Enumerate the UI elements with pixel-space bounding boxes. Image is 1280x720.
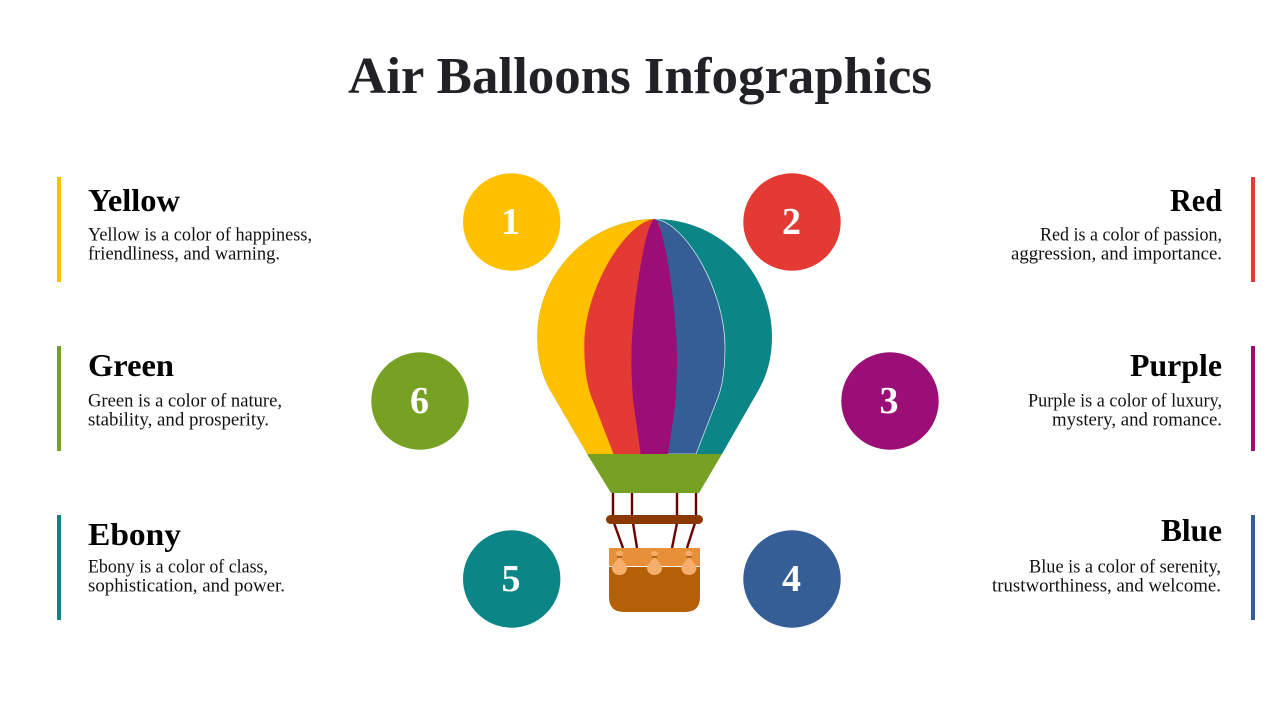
panel: green: stability, and prosperity.	[88, 410, 269, 430]
panel: purple: Purple	[1130, 347, 1222, 383]
panel: blue: Blue	[1161, 512, 1222, 548]
panel: yellow	[57, 177, 312, 282]
number badge 2	[743, 173, 841, 271]
panel: green: Green is a color of nature,	[88, 390, 282, 412]
panel: ebony: Ebony	[88, 516, 181, 552]
panel: ebony	[57, 515, 285, 620]
rope band	[606, 515, 703, 524]
balloon skirt	[587, 454, 722, 493]
number badge 6: 6	[410, 380, 429, 422]
sandbags	[612, 551, 696, 575]
panel: red: Red	[1170, 182, 1222, 218]
panel: blue: trustworthiness, and welcome.	[992, 576, 1221, 596]
hot air balloon illustration	[537, 219, 772, 612]
number badge 5	[463, 530, 560, 628]
panel: red: Red is a color of passion,	[1040, 224, 1222, 246]
panel: yellow: friendliness, and warning.	[88, 244, 280, 264]
panel: yellow: Yellow is a color of happiness,	[88, 224, 312, 246]
number badge 4: 4	[782, 558, 801, 600]
number badge 5: 5	[502, 558, 520, 600]
number badge 1	[463, 173, 560, 271]
panel: yellow: Yellow	[88, 182, 180, 218]
title: Air Balloons Infographics	[348, 48, 932, 105]
panel: red: aggression, and importance.	[1011, 244, 1222, 264]
number badge 4	[743, 530, 841, 628]
number badge 6	[371, 352, 469, 450]
panel: ebony: Ebony is a color of class,	[88, 556, 268, 578]
number badge 1: 1	[501, 201, 520, 243]
panel: blue	[992, 512, 1255, 620]
basket	[609, 548, 700, 612]
balloon envelope	[537, 219, 772, 454]
panel: blue: Blue is a color of serenity,	[1029, 556, 1221, 578]
number badge 2: 2	[782, 201, 801, 243]
panel: ebony: sophistication, and power.	[88, 576, 285, 596]
panel: green	[57, 346, 282, 451]
ropes	[613, 493, 696, 548]
panel: purple: Purple is a color of luxury,	[1028, 390, 1222, 412]
panel: green: Green	[88, 347, 174, 383]
panel: purple	[1028, 346, 1255, 451]
number badge 3: 3	[880, 380, 898, 422]
number badge 3	[841, 352, 939, 450]
panel: purple: mystery, and romance.	[1052, 410, 1222, 430]
panel: red	[1011, 177, 1255, 282]
